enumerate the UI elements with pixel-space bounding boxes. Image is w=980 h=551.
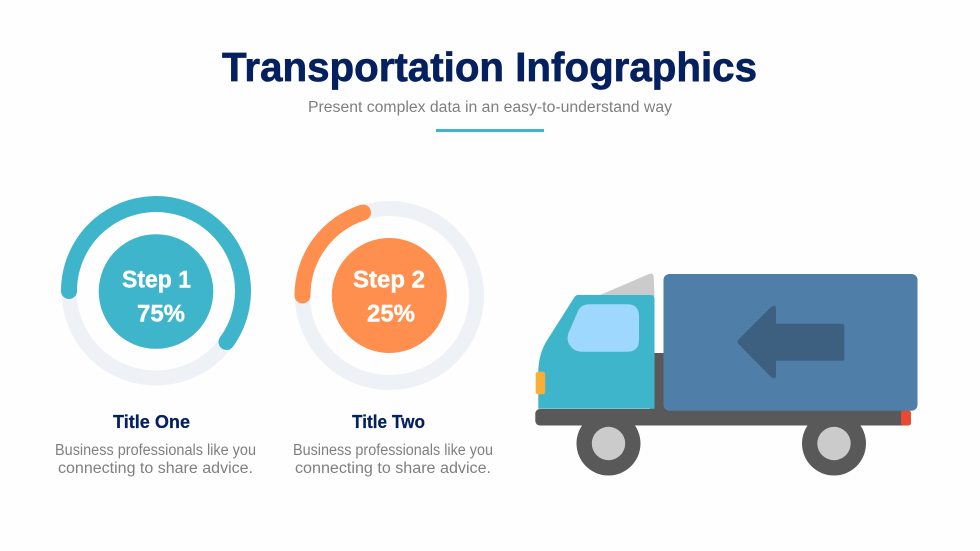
panel: step 1 [55,204,256,477]
description: title two [293,442,493,477]
center disc: step 2 [332,238,447,353]
label: step 2: Step 2 [353,266,425,294]
title underline accent [436,129,544,132]
ring track: step 2 [302,208,476,382]
value: 25%: 25% [367,300,415,328]
subtitle: Present complex data in an easy-to-understand way [308,99,672,116]
front wheel [576,412,640,476]
amber headlight [536,372,545,394]
cab window [568,304,639,352]
value: 75%: 75% [137,300,185,328]
arrow pointing left [738,306,844,378]
progress arc: 75% [69,204,243,342]
heading: title two: Title Two [352,412,425,432]
center disc: step 1 [99,234,213,349]
heading: title one: Title One [113,412,190,432]
chassis rear riser [650,353,670,411]
icon: delivery truck [535,274,918,476]
panel: step 2 [293,208,493,477]
rear wheel [802,412,866,476]
cargo box [664,274,918,411]
chassis [535,409,907,426]
cab [538,295,654,409]
description: title one: Business professionals like you [55,442,256,459]
ring track: step 1 [69,204,243,378]
label: step 1: Step 1 [122,266,191,294]
title: Transportation Infographics [222,44,757,90]
description: title two: Business professionals like you [293,442,493,459]
roof deflector [600,274,654,296]
progress arc: 25% [302,212,363,296]
description: title two: connecting to share advice. [295,460,491,477]
description: title one [55,442,256,477]
red tail light [901,410,911,426]
description: title one: connecting to share advice. [58,460,253,477]
